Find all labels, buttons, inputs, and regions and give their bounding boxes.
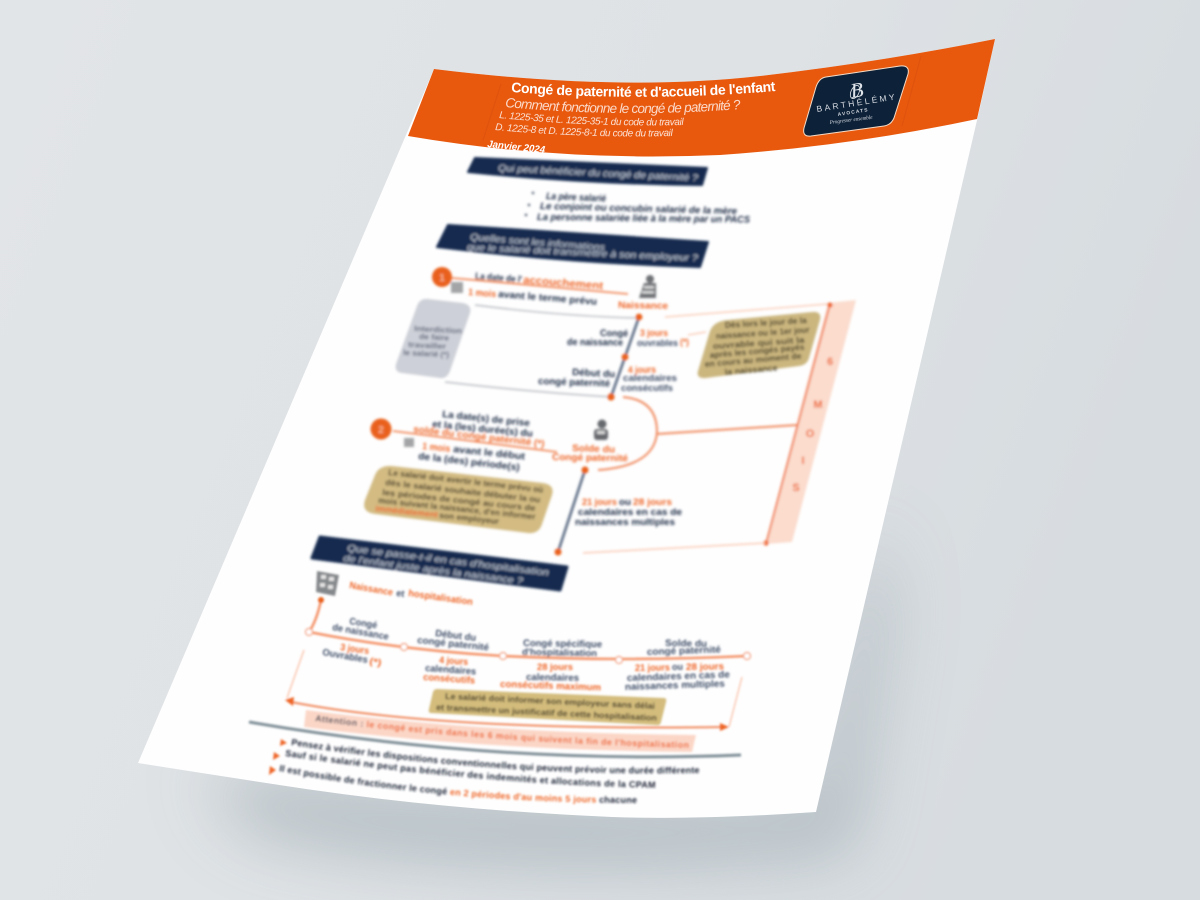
balance label: Congé paternité [552, 452, 628, 464]
brace and connector to 6 mois [598, 397, 797, 470]
timeline labels below: 3 jours [340, 642, 370, 657]
list of beneficiaries [525, 191, 751, 226]
banner: hospitalisation: Que se passe-t-il en cas d'hospitalisation [347, 543, 549, 579]
panel: 6 mois span: O [806, 428, 815, 440]
callout: employer notice: immédiatement [375, 503, 439, 520]
list of beneficiaries: Le conjoint ou concubin salarié de la mère [540, 201, 738, 217]
paper shadow [200, 520, 890, 864]
callout: employer notice: son employeur [439, 510, 500, 526]
panel: no-work period: de faire [419, 332, 450, 343]
timeline labels above: congé paternité [647, 644, 721, 658]
birth leave labels [567, 328, 689, 349]
paternity start labels: congé paternité [538, 376, 610, 390]
timeline: hospitalisation [306, 597, 750, 664]
notes list [268, 738, 701, 806]
logo: BARTHÉLÉMY [816, 92, 896, 114]
birth leave labels: ouvrables [637, 338, 678, 349]
timeline labels below: 4 jours [439, 655, 468, 668]
icon: hospital [316, 571, 339, 596]
step 2 badge [370, 418, 392, 440]
timeline labels above: Congé [349, 616, 378, 631]
side connector lines [287, 650, 742, 727]
timeline labels above: Solde du [665, 638, 707, 650]
timeline labels below: consécutifs [423, 672, 475, 687]
callout: first day of birth leave: après les congés payés [709, 342, 805, 360]
banner: who can benefit [468, 158, 707, 185]
step 2 text: La date(s) de prise [442, 409, 530, 429]
callout: first day of birth leave: naissance ou le 1er jour [715, 324, 811, 341]
timeline labels above: Début du [435, 628, 477, 644]
double arrow [285, 697, 729, 731]
date: Janvier 2024 [487, 139, 546, 156]
callout: employer notice: les périodes de congé au cours de [382, 487, 536, 513]
hospital birth label [348, 580, 474, 608]
list of beneficiaries: La personne salariée liée à la mère par un PACS [537, 212, 751, 226]
balance duration [575, 497, 682, 528]
callout: employer notice: Le salarié doit avertir le terme prévu où [388, 467, 544, 495]
callout: employer notice: dès le salarié souhaite débuter la ou [385, 477, 541, 505]
end of span line [583, 543, 766, 553]
logo [804, 66, 908, 136]
timeline labels above: de naissance [331, 622, 390, 643]
banner: who can benefit: Qui peut bénéficier du congé de paternité ? [498, 163, 699, 184]
banner: hospitalisation [312, 537, 567, 590]
timeline labels above: Congé spécifique [523, 638, 602, 650]
callout: inform employer: et transmettre un justificatif de cette hospitalisation [436, 702, 657, 723]
legal reference 1: L. 1225-35 et L. 1225-35-1 du code du travail [499, 111, 684, 126]
panel: no-work period: Interdiction [414, 324, 463, 336]
step 1 badge: 1 [439, 273, 445, 284]
banner: information to transmit: Quelles sont les informations [470, 232, 605, 254]
timeline: balance of leave [554, 466, 588, 556]
leader lines [665, 304, 828, 335]
icon: parent [594, 420, 608, 440]
panel: 6 mois span: 6 [827, 356, 833, 368]
banner: information to transmit: que le salarié doit transmettre à son employeur ? [467, 242, 699, 264]
panel: 6 mois span: I [801, 455, 805, 467]
step 2 text: avant le début [453, 444, 526, 463]
step 1 text: 1 mois [468, 287, 497, 300]
balance label: Solde du [572, 443, 615, 456]
hospital birth label: hospitalisation [408, 588, 474, 608]
icon: calendar [451, 282, 463, 293]
banner: hospitalisation: de l'enfant juste après la naissance ? [343, 553, 524, 587]
step 2 text: de la (des) période(s) [418, 451, 520, 474]
timeline labels above: d'hospitalisation [522, 647, 597, 659]
step 1 badge [432, 267, 452, 287]
callout: first day of birth leave: Dès lors le jour de la [725, 315, 807, 330]
timeline labels above [331, 616, 721, 659]
timeline labels below: calendaires en cas de [627, 669, 730, 684]
birth leave labels: de naissance [567, 337, 623, 348]
callout: first day of birth leave: ouvrable qui suit la [712, 335, 805, 351]
logo: AVOCATS [837, 107, 869, 118]
timeline labels below: 28 jours [686, 661, 724, 673]
balance duration: ou [619, 497, 631, 508]
timeline labels below: 21 jours [635, 662, 670, 674]
logo: Progresser ensemble [829, 115, 873, 126]
paternity start labels: consécutifs [621, 383, 673, 394]
panel: 6 mois span: S [792, 482, 800, 494]
subtitle: Comment fonctionne le congé de paternité ? [506, 98, 740, 116]
notes list: Pensez à vérifier les dispositions conventionnelles qui peuvent prévoir une durée différente [290, 738, 701, 776]
birth leave labels: Congé [600, 328, 628, 339]
step 2 text: solde du congé paternité (*) [413, 424, 545, 450]
callout: employer notice [364, 466, 553, 533]
timeline labels below: 28 jours [537, 662, 573, 673]
paternity start labels: Début du [572, 367, 616, 380]
birth label: Naissance [618, 300, 668, 312]
step 2 text [393, 409, 557, 474]
callout: first day of birth leave: la naissance [724, 362, 778, 377]
panel: no-work period: travailler [408, 340, 446, 351]
list of beneficiaries: La père salarié [546, 191, 607, 205]
logo: B [849, 77, 865, 103]
title: Congé de paternité et d'accueil de l'enfant [512, 82, 776, 99]
body content [312, 158, 856, 590]
legal reference 2: D. 1225-8 et D. 1225-8-1 du code du travail [495, 123, 673, 136]
icon: calendar [404, 438, 414, 447]
step 2 text: et la (les) durée(s) du [432, 419, 533, 440]
step 1 text: accouchement [523, 274, 604, 292]
divider [249, 722, 741, 757]
birth leave labels: 3 jours [640, 328, 668, 339]
header band [408, 39, 995, 156]
banner: information to transmit [437, 225, 708, 267]
callout: inform employer: Le salarié doit informer son employeur sans délai [445, 691, 655, 711]
panel: no-work period: le salarié (*) [403, 348, 450, 359]
timeline labels below: consécutifs maximum [500, 679, 601, 694]
balance duration: naissances multiples [575, 517, 675, 528]
panel: 6 mois span [763, 300, 856, 546]
timeline labels below: ou [672, 662, 683, 673]
icon: baby [639, 275, 656, 298]
attention band: Attention : le congé est pris dans les 6 mois qui suivent la fin de l'hospitalisation [314, 714, 690, 749]
balance duration: calendaires en cas de [578, 507, 682, 518]
panel: 6 mois span: M [813, 399, 823, 411]
callout: inform employer [429, 689, 666, 725]
step 1 text: avant le terme prévu [498, 289, 598, 308]
timeline labels below: (*) [368, 656, 382, 669]
step 2 badge: 2 [378, 425, 384, 436]
timeline labels below: calendaires [425, 663, 476, 678]
step 1 text: La date de l' [475, 271, 522, 286]
paternity start labels: 4 jours [628, 365, 656, 376]
notes list: Il est possible de fractionner le congé en 2 périodes d'au moins 5 jours chacune [278, 764, 638, 806]
lower content [248, 570, 752, 806]
balance duration: 28 jours [633, 497, 672, 508]
paper sheet [138, 39, 995, 818]
timeline labels below [321, 642, 730, 694]
timeline labels below: Ouvrables [321, 647, 369, 666]
step 1 text [452, 271, 628, 308]
paternity start labels [538, 365, 677, 394]
notes list: Sauf si le salarié ne peut pas bénéficier des indemnités et allocations de la CPAM [284, 748, 657, 790]
birth bracket line [445, 305, 637, 397]
callout: first day of birth leave [698, 312, 820, 378]
balance duration: 21 jours [582, 497, 617, 508]
callout: first day of birth leave: en cours au moment de [704, 351, 802, 369]
timeline labels above: congé paternité [417, 635, 489, 654]
hospital birth label: Naissance [348, 580, 394, 599]
panel: no-work period [396, 299, 470, 378]
timeline labels below: calendaires [526, 672, 579, 684]
callout: employer notice: mois suivant la naissance, d'en informer [378, 495, 537, 522]
birth leave labels: (*) [680, 337, 689, 348]
balance label [552, 443, 628, 464]
hospital birth label: et [396, 588, 406, 600]
timeline labels below: naissances multiples [625, 679, 725, 693]
timeline: birth to paternity start [607, 314, 642, 401]
step 2 text: 1 mois [422, 441, 451, 455]
paternity start labels: calendaires [623, 373, 677, 384]
